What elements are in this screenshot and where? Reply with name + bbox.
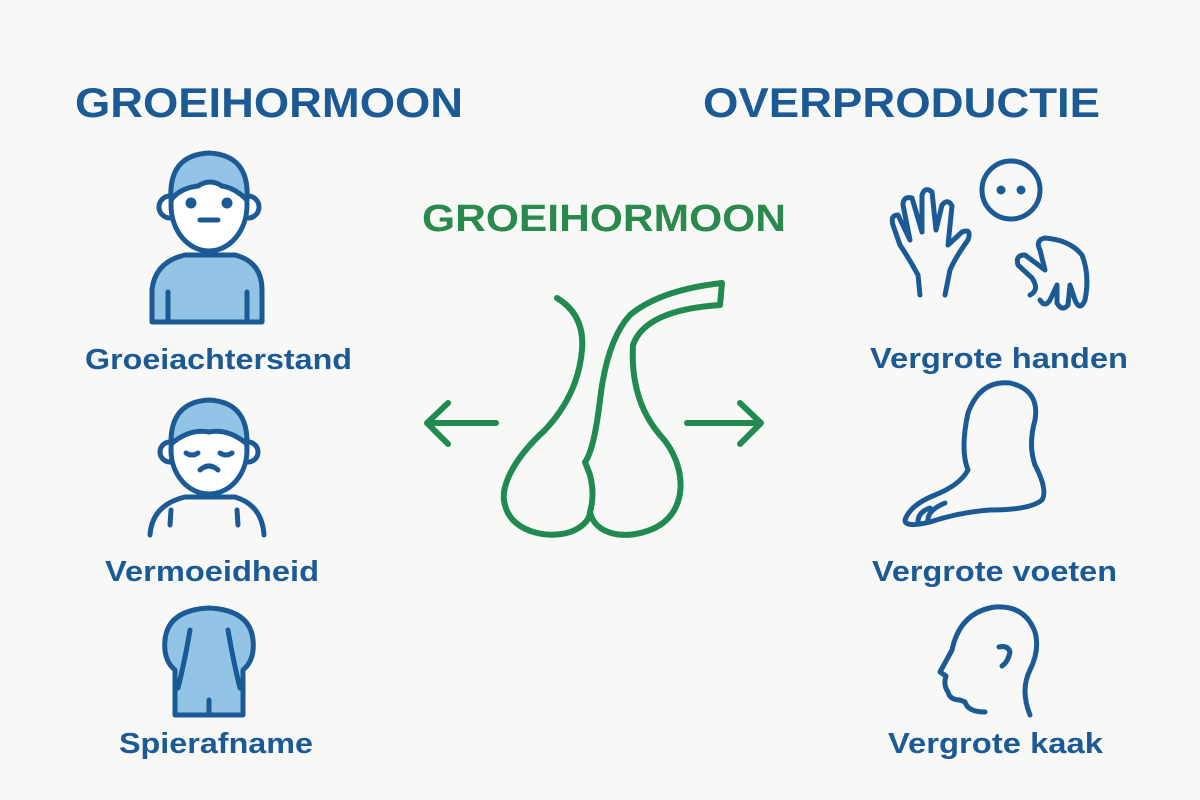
- icon: child (growth delay): [152, 153, 262, 322]
- label: Vergrote kaak: Vergrote kaak: [888, 728, 1104, 760]
- title: right: OVERPRODUCTIE: [703, 79, 1100, 126]
- arrow: right: [687, 403, 761, 444]
- label: Vergrote handen: Vergrote handen: [870, 343, 1128, 375]
- icon: hands and face: [892, 161, 1087, 308]
- icon: tired child: [150, 400, 264, 535]
- icon: torso (muscle loss): [165, 608, 253, 715]
- title: left: GROEIHORMOON: [75, 79, 463, 126]
- label: Groeiachterstand: Groeiachterstand: [85, 344, 352, 376]
- icon: head profile: [940, 607, 1037, 715]
- icon: foot: [905, 383, 1044, 525]
- label: Spierafname: Spierafname: [119, 728, 313, 760]
- label: Vergrote voeten: Vergrote voeten: [872, 556, 1117, 588]
- icon: pituitary gland: [504, 283, 722, 535]
- label: Vermoeidheid: Vermoeidheid: [105, 556, 319, 588]
- center heading: GROEIHORMOON: [422, 198, 786, 240]
- arrow: left: [427, 403, 496, 444]
